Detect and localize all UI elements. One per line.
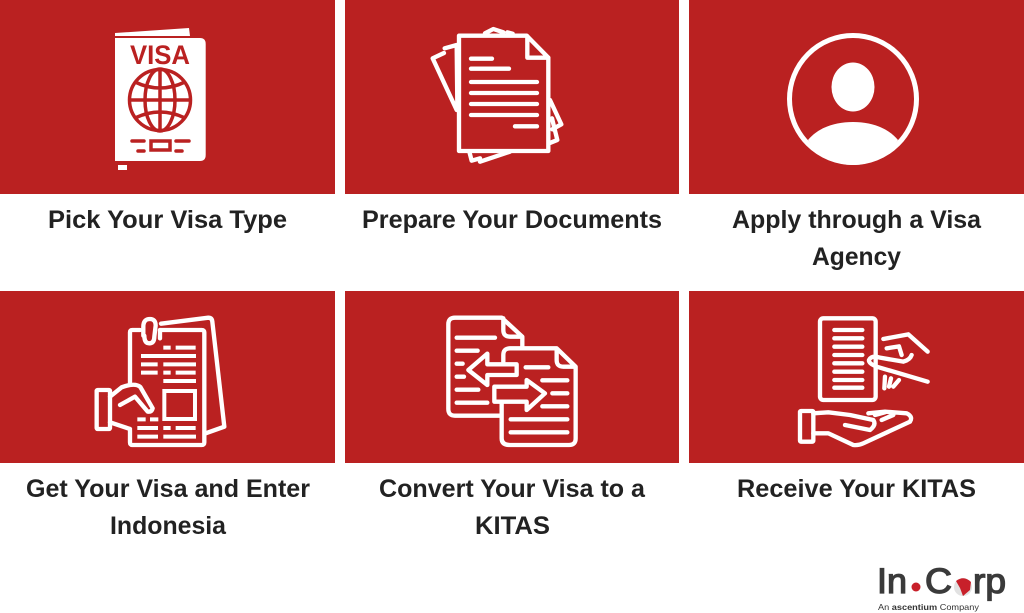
icon: documents exchange arrows [448,318,576,445]
panel: prepare your documents [345,0,679,194]
icon: document stack [433,29,561,162]
panel: apply through a visa agency [689,0,1024,194]
icon: person in circle [790,36,916,165]
label: pick your visa type: Pick Your Visa Type [48,206,287,234]
logo: incorp: In [877,562,907,601]
label: convert your visa to a kitas [379,475,646,540]
label: apply through a visa agency: Agency [812,243,901,271]
label: convert your visa to a kitas: KITAS [475,512,550,540]
label: get your visa and enter indonesia: Indonesia [110,512,227,540]
logo: incorp [877,562,1006,612]
label: prepare your documents: Prepare Your Documents [362,206,662,234]
panel: get your visa and enter indonesia [0,291,335,463]
icon: visa passport [115,28,206,170]
icon: hand holding visa document [97,318,224,445]
label: get your visa and enter indonesia: Get Your Visa and Enter [26,475,310,503]
label: get your visa and enter indonesia [26,475,310,540]
panel: pick your visa type [0,0,335,194]
logo: incorp: C [925,562,952,601]
logo: incorp: rp [973,562,1006,601]
label: receive your kitas: Receive Your KITAS [737,475,976,503]
logo: incorp: An ascentium Company [878,602,980,612]
label: apply through a visa agency [732,206,982,271]
label: convert your visa to a kitas: Convert Your Visa to a [379,475,646,503]
panel: convert your visa to a kitas [345,291,679,463]
label: apply through a visa agency: Apply through a Visa [732,206,982,234]
icon: hands passing document [800,318,928,445]
panel: receive your kitas [689,291,1024,463]
icon: visa passport: VISA [130,40,190,70]
icon: globe [954,578,972,596]
